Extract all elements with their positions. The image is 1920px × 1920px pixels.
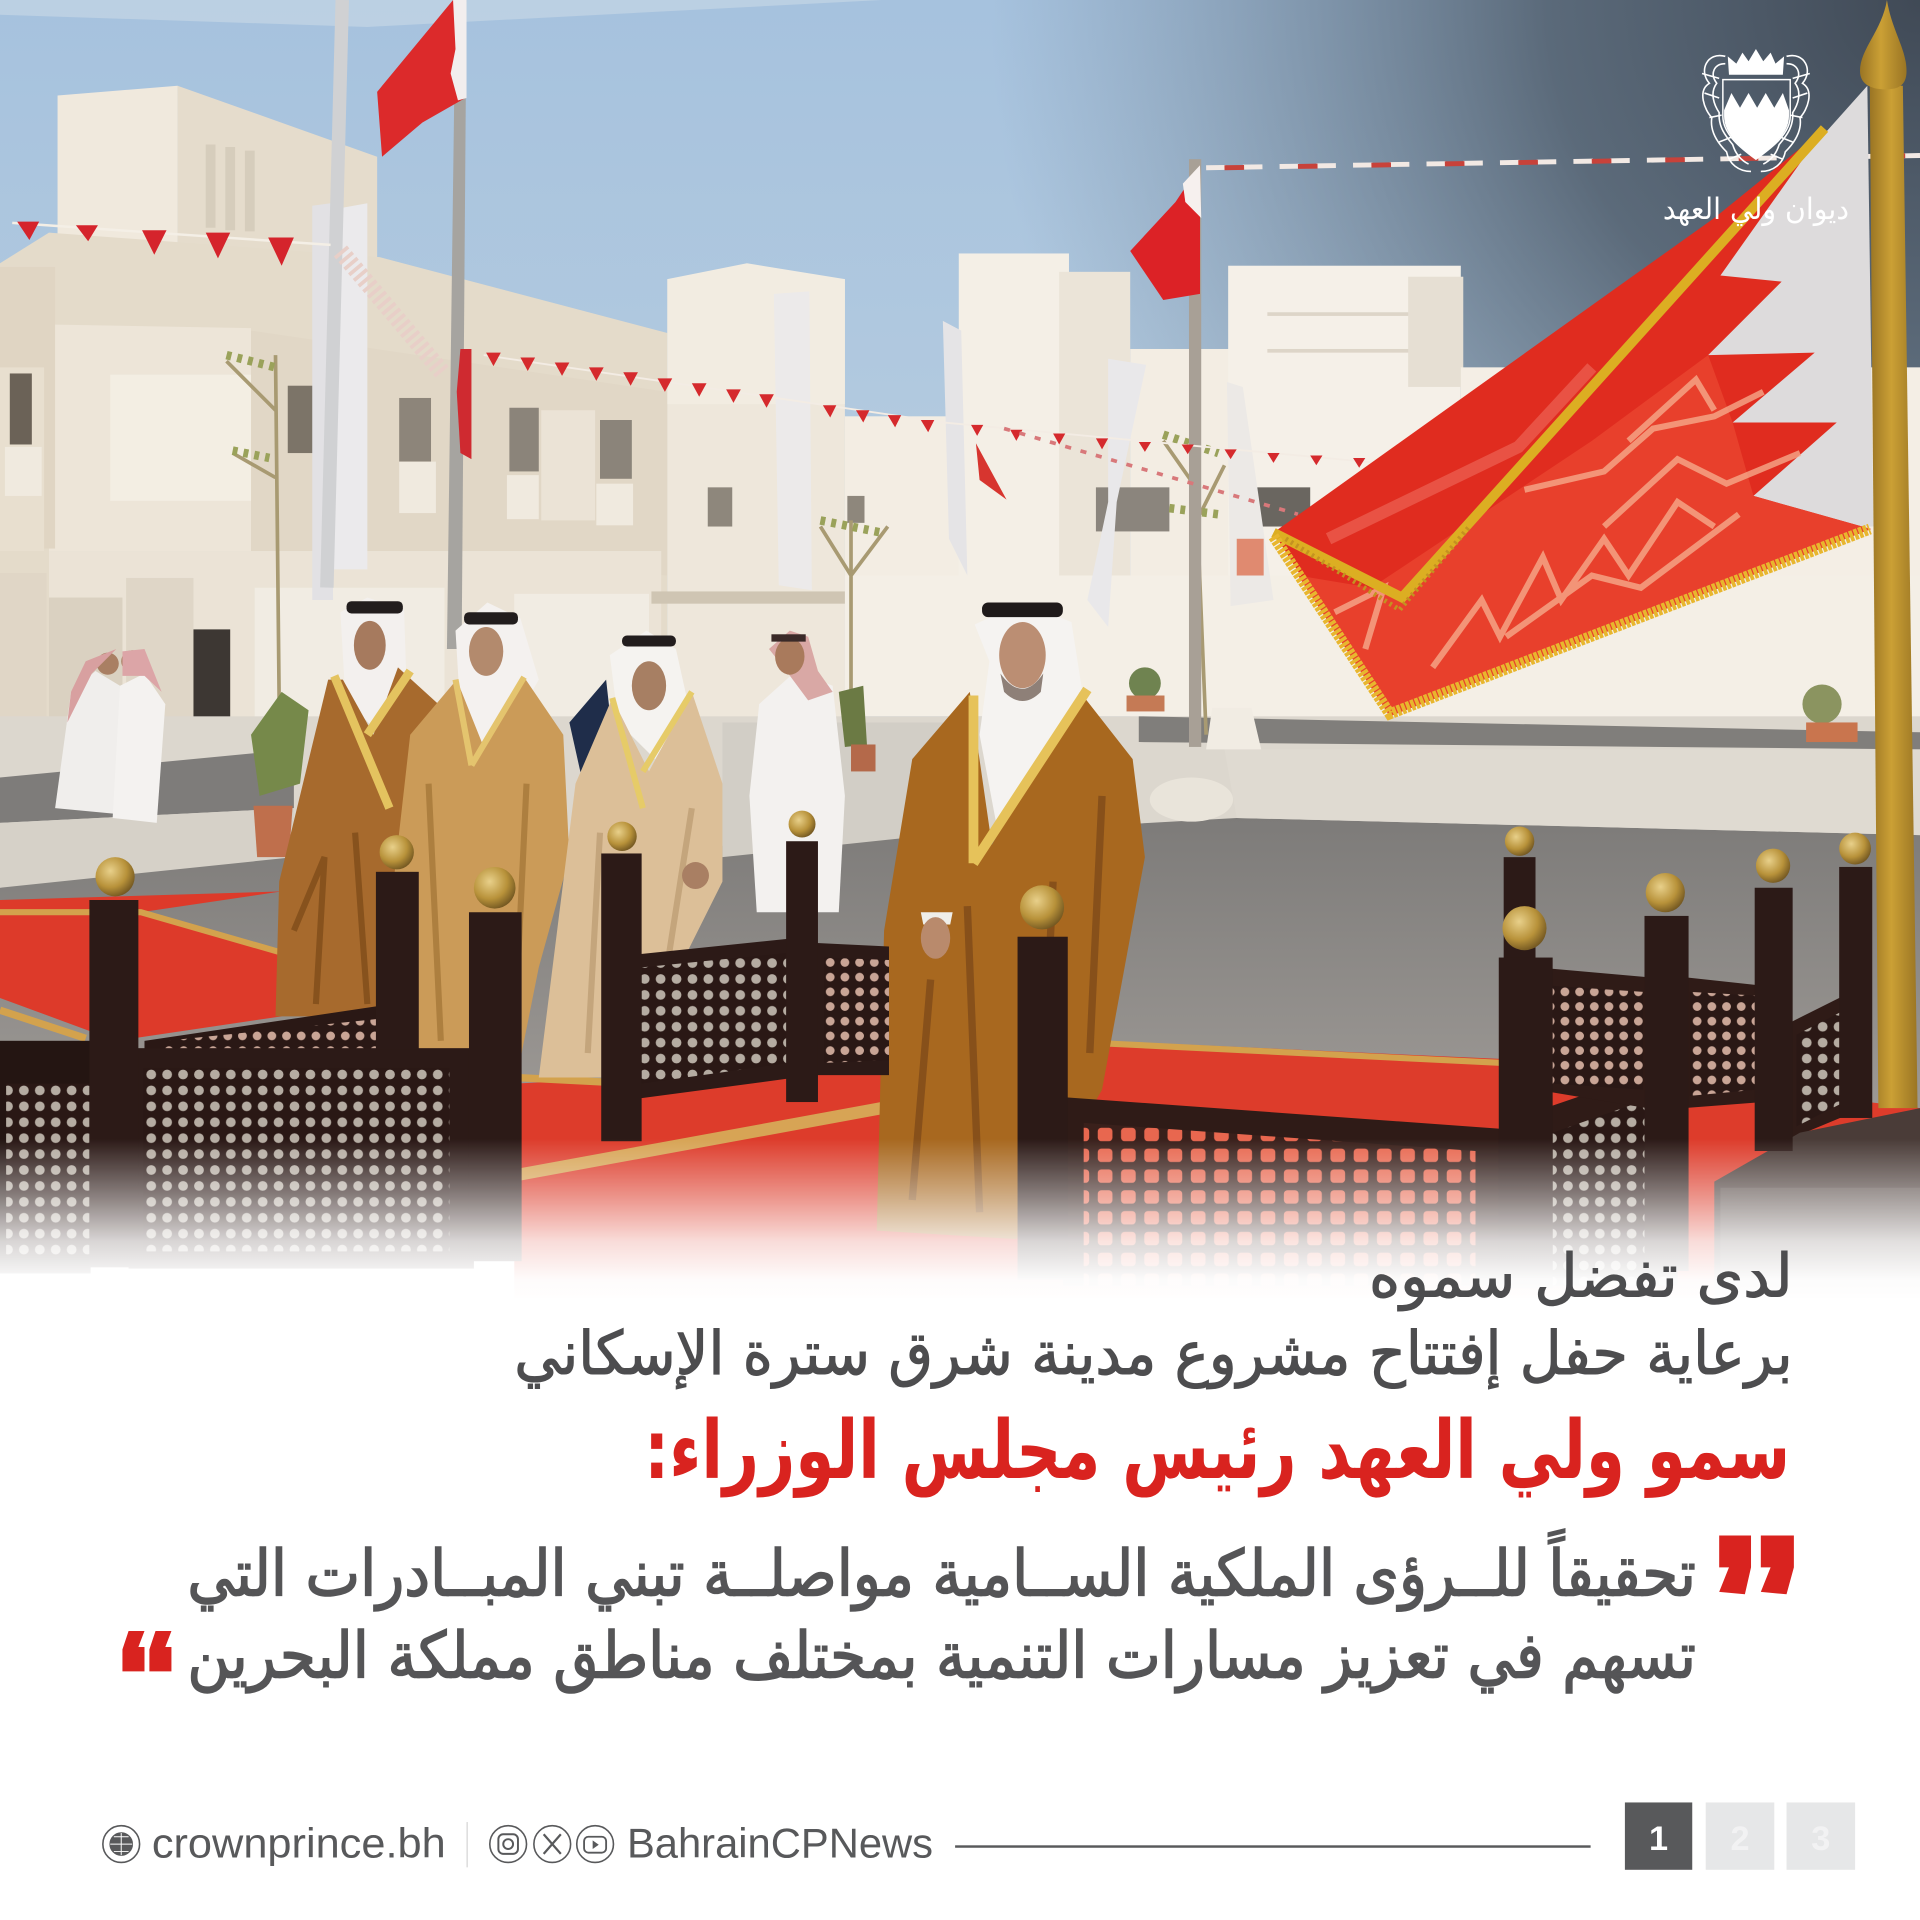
fence posts with gold balls bbox=[89, 811, 1872, 1288]
red carpets bbox=[0, 891, 1920, 1298]
icon: youtube bbox=[577, 1826, 613, 1862]
photo: inauguration scene bbox=[0, 0, 1920, 1298]
page indicator 2: 2 bbox=[1730, 1820, 1750, 1858]
page indicator 3: 3 bbox=[1811, 1820, 1830, 1858]
icon: shield bbox=[1723, 80, 1790, 159]
logo wordmark: ديوان ولي العهد bbox=[1663, 192, 1849, 227]
icon: closing quote mark bbox=[122, 1631, 171, 1671]
man: crown prince bbox=[877, 602, 1145, 1239]
icon: crest wreath bbox=[1702, 56, 1810, 171]
icon: x bbox=[534, 1826, 571, 1862]
icon: crown bbox=[1728, 49, 1784, 75]
website: crownprince.bh bbox=[152, 1820, 446, 1867]
icon: shield white field bbox=[1724, 93, 1789, 159]
ground and road bbox=[0, 716, 1920, 1139]
dark corner gradient bbox=[940, 0, 1920, 784]
planters bbox=[251, 667, 1858, 857]
icon: globe bbox=[103, 1826, 140, 1862]
large bahraini flag bbox=[1273, 86, 1873, 716]
quote line 2: تسهم في تعزيز مسارات التنمية بمختلف مناطق مملكة البحرين bbox=[187, 1620, 1696, 1694]
guests in the background bbox=[55, 631, 845, 912]
quote line 1: تحقيقاً للــرؤى الملكية الســامية مواصلــة تبني المبــادرات التي bbox=[187, 1529, 1696, 1612]
lattice fence panels bbox=[0, 938, 1920, 1298]
man: second dignitary bbox=[394, 602, 569, 1059]
white fade under the photo bbox=[0, 1139, 1920, 1304]
page indicator 2 bbox=[1706, 1802, 1774, 1870]
bunting strings bbox=[12, 156, 1920, 514]
page indicator 3 bbox=[1787, 1802, 1855, 1870]
social handle: BahrainCPNews bbox=[627, 1820, 933, 1867]
heading: intro line 1: لدى تفضل سموه bbox=[1369, 1242, 1793, 1312]
white text background bbox=[0, 1303, 1920, 1920]
man: third dignitary bbox=[539, 631, 722, 1078]
heading: intro line 2: برعاية حفل إفتتاح مشروع مدينة شرق سترة الإسكاني bbox=[514, 1319, 1793, 1389]
thin cloud streak bbox=[0, 0, 882, 27]
page indicator 1 bbox=[1625, 1802, 1692, 1870]
vertical white banners bbox=[312, 203, 1273, 627]
page indicator 1: 1 bbox=[1649, 1820, 1668, 1858]
small street trees bbox=[227, 355, 1224, 735]
footer bbox=[103, 1802, 1855, 1870]
icon: instagram bbox=[490, 1826, 527, 1862]
flag poles bbox=[320, 0, 1201, 747]
sky bbox=[0, 0, 1920, 784]
bahraini flags on poles bbox=[377, 0, 1201, 500]
man: left dignitary bbox=[276, 598, 438, 1016]
icon: opening quote mark bbox=[1719, 1536, 1794, 1594]
flagpole with gold finial bbox=[1860, 0, 1918, 1108]
buildings bbox=[0, 86, 1920, 747]
logo: crown prince court bbox=[1663, 49, 1849, 227]
